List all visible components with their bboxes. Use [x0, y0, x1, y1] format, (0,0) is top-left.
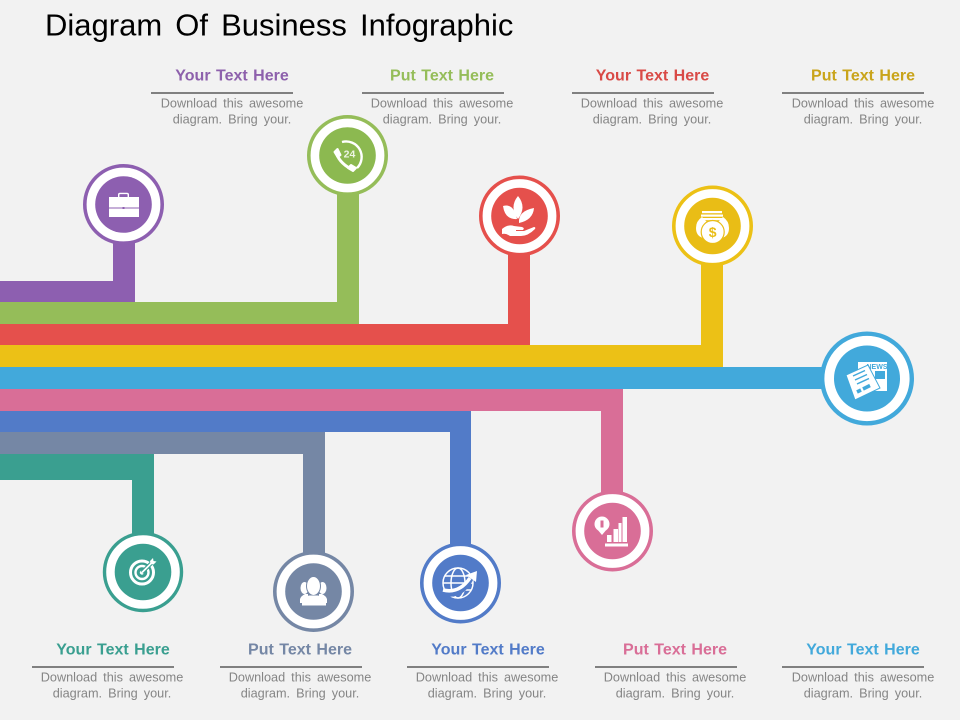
text block: slate: diagram. Bring your. [241, 686, 359, 700]
text block: slate: Download this awesome [229, 670, 371, 684]
node: green 24h phone [309, 117, 386, 194]
text block: pink: Put Text Here [623, 642, 727, 658]
icon: newspapers: NEWS [866, 364, 888, 371]
title: Diagram Of Business Infographic [45, 8, 513, 42]
text block: royal blue: Your Text Here [431, 642, 545, 658]
node: yellow money bags [674, 187, 751, 265]
icon: 24 hour phone: 24 [344, 148, 355, 160]
connector: green [0, 190, 359, 324]
connector: yellow [0, 260, 723, 367]
icon: target [130, 558, 156, 584]
text block: blue: Your Text Here [806, 642, 920, 658]
connector: teal [0, 454, 154, 538]
text block: pink: Download this awesome [604, 670, 746, 684]
text block: red [572, 68, 723, 126]
text block: blue [782, 642, 934, 700]
text block: red: diagram. Bring your. [593, 112, 711, 126]
text block: pink: diagram. Bring your. [616, 686, 734, 700]
icon: group of people [300, 576, 327, 606]
icon: briefcase [109, 193, 139, 217]
text block: gold [782, 68, 934, 126]
text block: teal: diagram. Bring your. [53, 686, 171, 700]
text block: teal [32, 642, 183, 700]
text block: teal: Your Text Here [56, 642, 170, 658]
connector: red [0, 250, 530, 345]
connector: royal blue [0, 411, 471, 548]
icon: plant in hand [502, 196, 535, 236]
node: teal target [104, 534, 182, 610]
text block: gold: diagram. Bring your. [804, 112, 922, 126]
text block: purple: Download this awesome [161, 96, 303, 110]
text block: teal: Download this awesome [41, 670, 183, 684]
icon: globe with arrow [443, 568, 477, 598]
text block: royal blue: diagram. Bring your. [428, 686, 546, 700]
node: purple briefcase [85, 166, 162, 243]
text block: slate [220, 642, 371, 700]
text block: blue: diagram. Bring your. [804, 686, 922, 700]
icon: money bags: $ [709, 224, 717, 240]
connector: purple [0, 240, 135, 302]
text block: gold: Put Text Here [811, 68, 915, 84]
text block: gold: Download this awesome [792, 96, 934, 110]
connector: slate [0, 432, 325, 558]
text block: purple: Your Text Here [175, 68, 289, 84]
node: slate people [275, 553, 352, 630]
text block: green [362, 68, 513, 126]
text block: red: Download this awesome [581, 96, 723, 110]
node: pink chart [574, 492, 651, 570]
text block: pink [595, 642, 746, 700]
text block: blue: Download this awesome [792, 670, 934, 684]
text block: green: diagram. Bring your. [383, 112, 501, 126]
text block: green: Put Text Here [390, 68, 494, 84]
text block: purple [151, 68, 303, 126]
connector: blue [0, 367, 830, 389]
text block: royal blue [407, 642, 558, 700]
node: blue newspaper [822, 334, 912, 423]
node: royal blue globe [422, 544, 499, 622]
text block: green: Download this awesome [371, 96, 513, 110]
node: red plant in hand [481, 177, 558, 255]
text block: red: Your Text Here [596, 68, 709, 84]
text block: purple: diagram. Bring your. [173, 112, 291, 126]
text block: royal blue: Download this awesome [416, 670, 558, 684]
connector: pink [0, 389, 623, 496]
text block: slate: Put Text Here [248, 642, 352, 658]
icon: bar chart with pin [594, 516, 628, 546]
